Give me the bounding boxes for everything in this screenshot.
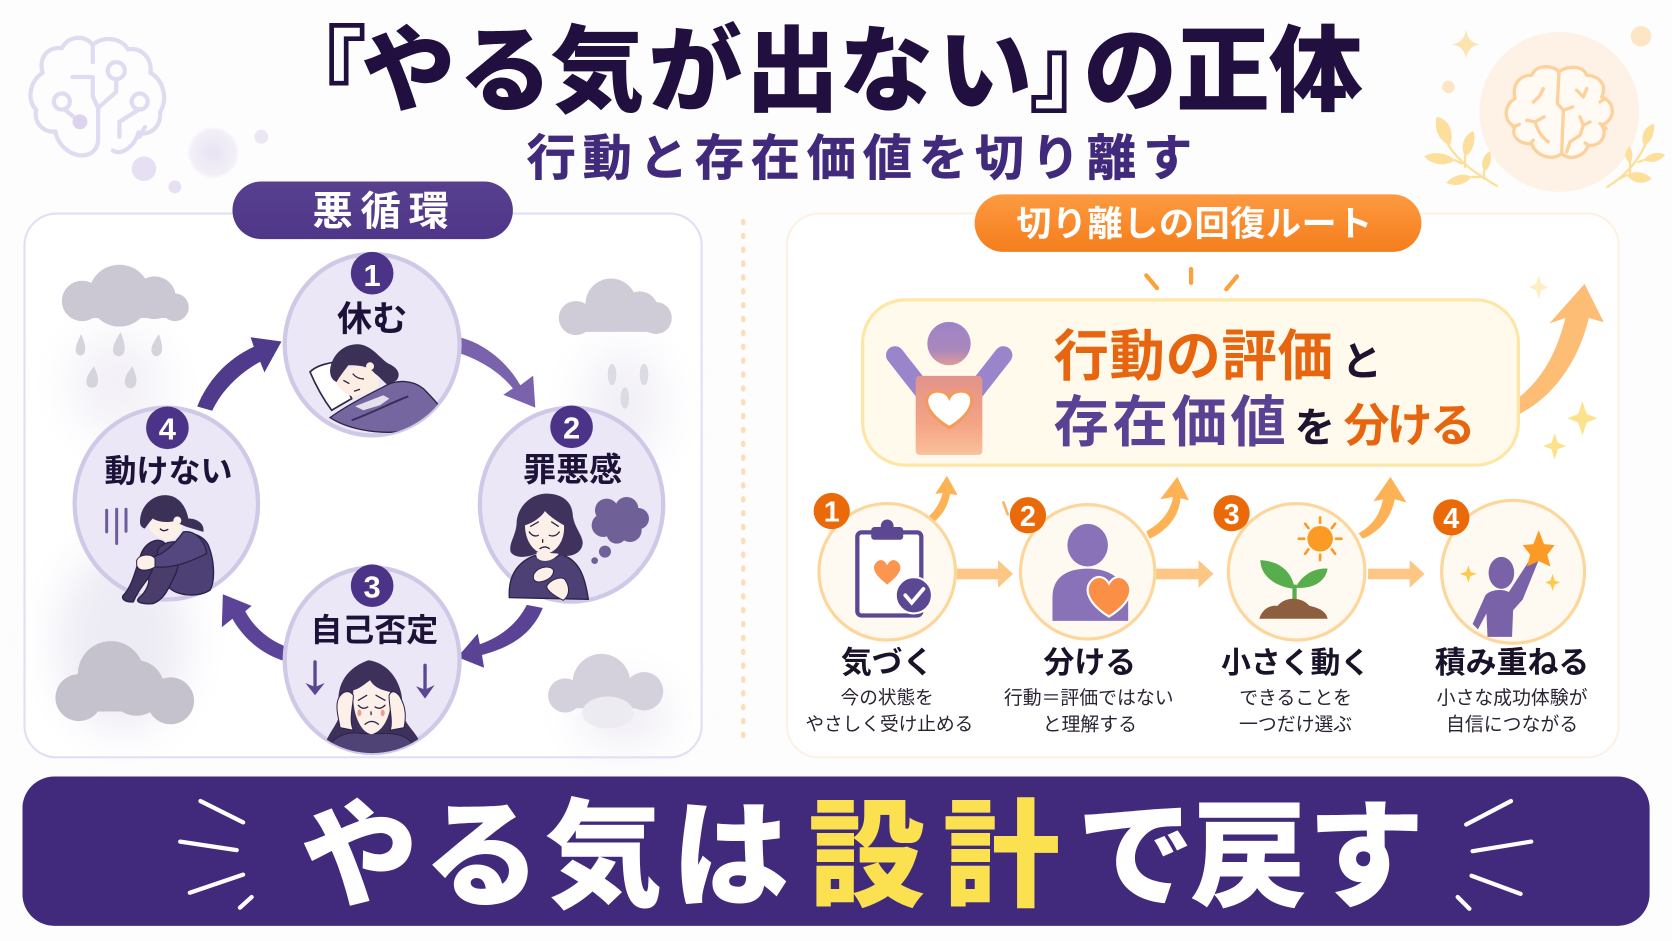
- decoration: circuit brain: [31, 38, 164, 155]
- arrow 1 to 2: [460, 337, 535, 408]
- icon: person reaching star: [1460, 530, 1560, 637]
- badge 1: 1: [364, 258, 381, 293]
- banner message: やる気は設計で戻す: [301, 791, 1425, 922]
- step description: [1239, 687, 1352, 735]
- thought cloud: [591, 497, 649, 564]
- step circle 1: rest: [285, 252, 460, 435]
- falling lines: [107, 509, 126, 544]
- key message box: [863, 300, 1518, 465]
- step description: [1004, 687, 1174, 735]
- panel label: vicious cycle: [232, 182, 513, 239]
- step title: 小さく動く: [1221, 647, 1370, 680]
- badge: 2: [1020, 501, 1036, 533]
- arrow 4 to 1: [197, 337, 282, 411]
- step description: やさしく受け止める: [805, 714, 973, 735]
- badge 4: 4: [159, 412, 177, 447]
- panel label: recovery route: [975, 194, 1421, 252]
- badge: [814, 493, 850, 529]
- illustration: crouching person: [123, 495, 214, 604]
- down arrows: [305, 662, 435, 699]
- label 2: 罪悪感: [523, 452, 622, 489]
- badge: [1010, 497, 1046, 533]
- step circle 3: self denial: [285, 564, 460, 764]
- step description: 自信につながる: [1446, 714, 1578, 735]
- message line 2: 存在価値: [1054, 392, 1286, 454]
- badge: [1213, 495, 1250, 531]
- cloud with rain: top left: [62, 265, 189, 388]
- badge 1: [351, 252, 393, 295]
- title: 『やる気が出ない』の正体: [273, 19, 1363, 124]
- arrow 3 to 4: [222, 594, 286, 661]
- arrow 2 to 3: [457, 605, 543, 668]
- rays left: [180, 801, 252, 908]
- illustration: head in hands: [326, 660, 418, 754]
- decoration: glowing brain with laurel: [1424, 26, 1665, 192]
- panel label: vicious cycle: 悪循環: [312, 188, 449, 234]
- label 1: 休む: [337, 300, 407, 339]
- rays right: [1458, 801, 1531, 909]
- cloud: bottom right: [548, 654, 663, 729]
- big up arrow: [1520, 284, 1604, 414]
- cloud: bottom left: [55, 641, 194, 724]
- soft mist: [59, 331, 672, 747]
- icon: clipboard: [857, 520, 932, 616]
- dotted divider: [741, 221, 745, 741]
- step 4: accumulate: [1433, 499, 1589, 735]
- flow arrows between steps: [956, 560, 1425, 588]
- panel label: recovery route: 切り離しの回復ルート: [1016, 205, 1372, 244]
- step 2: separate: [1003, 497, 1174, 735]
- illustration: worried person: [509, 494, 588, 600]
- step description: 行動＝評価ではない: [1004, 687, 1174, 708]
- step description: 一つだけ選ぶ: [1239, 714, 1352, 735]
- badge 4: [146, 407, 189, 449]
- badge: 4: [1443, 503, 1459, 535]
- badge 3: 3: [364, 569, 381, 604]
- step title: 積み重ねる: [1435, 645, 1589, 680]
- badge 2: [550, 405, 593, 448]
- label 3: 自己否定: [310, 612, 438, 648]
- subtitle: 行動と存在価値を切り離す: [527, 132, 1192, 186]
- bottom banner: [22, 777, 1650, 926]
- step title: 気づく: [841, 645, 934, 680]
- icon: person with heart: [1052, 524, 1130, 621]
- label 4: 動けない: [105, 453, 232, 489]
- badge: 3: [1224, 499, 1240, 531]
- icon: person with heart: [895, 322, 1003, 455]
- step description: 今の状態を: [841, 687, 934, 708]
- emphasis ticks: [1146, 269, 1237, 289]
- sparkles: [1529, 275, 1597, 460]
- step description: できることを: [1239, 687, 1352, 708]
- badge: [1433, 499, 1469, 536]
- cloud with rain: top right: [559, 279, 672, 409]
- step description: 小さな成功体験が: [1437, 687, 1588, 708]
- step 3: small action: [1213, 495, 1370, 735]
- panel: vicious cycle: [25, 214, 702, 764]
- step circle 2: guilt: [480, 405, 663, 602]
- small accent tick: [1003, 502, 1008, 514]
- step description: と理解する: [1043, 714, 1137, 735]
- badge 2: 2: [563, 411, 580, 446]
- panel: recovery route: [787, 214, 1619, 757]
- step description: [1437, 687, 1588, 735]
- step title: 分ける: [1043, 645, 1136, 680]
- icon: sprout: [1259, 560, 1328, 619]
- message line 1: 行動の評価: [1054, 326, 1333, 388]
- step circle 4: cannot move: [75, 407, 258, 604]
- step 1: notice: [805, 493, 973, 735]
- message line 1: と: [1341, 339, 1382, 385]
- message line 2: 分ける: [1344, 400, 1476, 452]
- icon: sun: [1299, 517, 1341, 560]
- message line 2: を: [1295, 405, 1335, 451]
- step description: [805, 687, 973, 735]
- up arrows from steps: [928, 476, 1406, 539]
- badge 3: [351, 564, 393, 607]
- badge: 1: [824, 497, 840, 529]
- decoration: bubbles: [132, 128, 268, 193]
- illustration: sleeping person: [310, 344, 439, 432]
